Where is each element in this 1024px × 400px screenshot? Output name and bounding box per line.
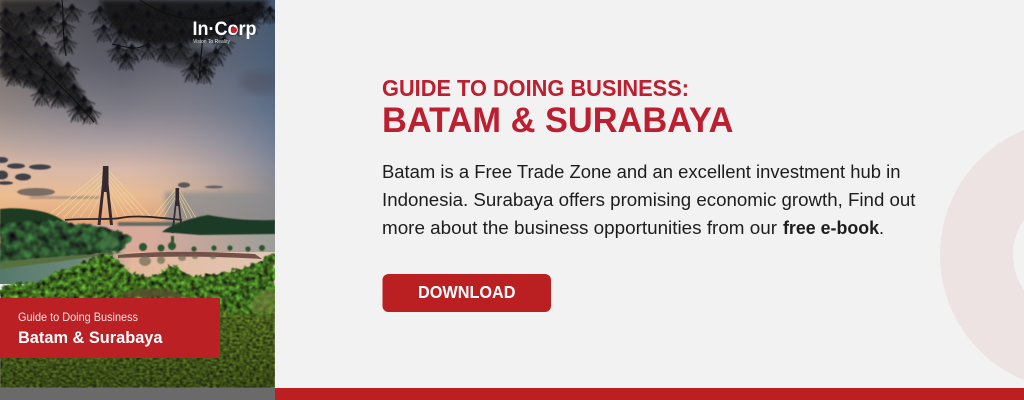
logo tagline: Vision To Reality — [193, 39, 231, 45]
cover label: title: Batam & Surabaya — [18, 328, 163, 347]
tree silhouette — [0, 0, 281, 124]
shrub reflections — [139, 255, 216, 266]
bottom bar — [0, 388, 1024, 400]
body text: Indonesia. Surabaya offers promising economic growth, Find out — [382, 190, 916, 210]
right hill — [162, 215, 275, 235]
foreground grass — [0, 300, 275, 388]
distant shore — [118, 222, 188, 226]
left forest — [0, 220, 132, 264]
river bank — [118, 252, 262, 259]
tree: dark canopy masses — [0, 0, 268, 116]
decorative ring — [976, 156, 1024, 354]
foreground bushes — [0, 254, 275, 315]
heading line 2: BATAM & SURABAYA — [382, 100, 734, 140]
left hill — [0, 208, 65, 236]
heading line 1: GUIDE TO DOING BUSINESS: — [382, 75, 689, 101]
bank shrubs — [139, 236, 265, 252]
body text: Batam is a Free Trade Zone and an excellent investment hub in — [382, 162, 900, 182]
sky — [0, 0, 280, 228]
body text: free e-book — [783, 218, 880, 238]
tree: branches — [0, 0, 250, 122]
cover photo — [0, 0, 284, 388]
logo wordmark: In·Corp — [192, 19, 256, 40]
tree: needle tufts — [0, 2, 281, 124]
body text: more about the business opportunities from our — [382, 218, 777, 238]
body text — [382, 162, 916, 238]
bridge — [48, 166, 196, 233]
logo mark: red dot — [231, 27, 237, 33]
body text: . — [879, 218, 884, 238]
logo — [192, 19, 256, 45]
download button — [382, 274, 551, 312]
cover label: subtitle: Guide to Doing Business — [18, 310, 138, 324]
cover label — [0, 298, 220, 358]
button label: DOWNLOAD — [418, 282, 516, 302]
clouds — [0, 157, 223, 196]
heading — [382, 75, 734, 140]
river — [0, 224, 275, 252]
